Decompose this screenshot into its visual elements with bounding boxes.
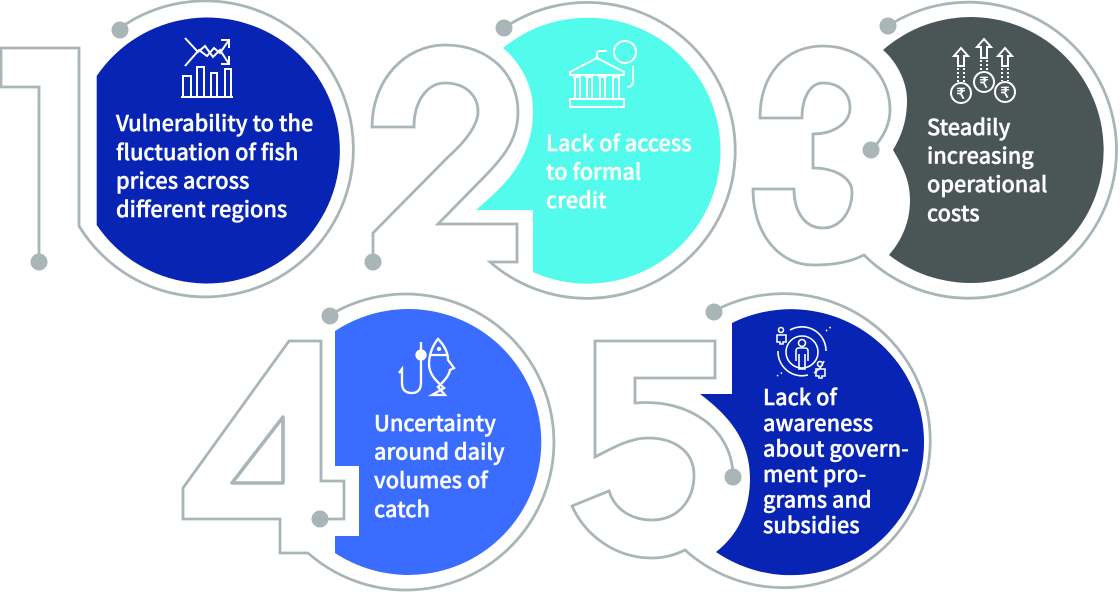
icon: bank with magnifier: [570, 41, 636, 107]
numeral 2 outline with ring: [364, 2, 735, 298]
text: Lack of: [763, 381, 837, 412]
blue circle: [97, 17, 340, 283]
numeral 3 outline with ring: [753, 2, 1116, 298]
text: volumes of: [374, 464, 489, 495]
text: grams and: [763, 484, 872, 514]
text: Vulnerability to the: [116, 107, 313, 138]
panel 4: daily catch: [183, 294, 554, 590]
icon: chart with crossing arrows: [181, 38, 233, 97]
text: subsidies: [763, 509, 860, 540]
icon: people in rings: [777, 326, 832, 378]
text: to formal: [546, 156, 641, 186]
icon: rising rupee coins: [951, 39, 1015, 103]
turquoise shape: [476, 18, 721, 284]
text: about govern-: [763, 432, 909, 464]
text: operational: [927, 168, 1047, 199]
dark shape: [883, 17, 1104, 283]
text: awareness: [763, 407, 873, 438]
numeral 5 outline with ring: [572, 294, 930, 588]
text: costs: [927, 197, 980, 228]
blue shape: [700, 309, 924, 575]
rupee symbols: ₹: [1000, 86, 1010, 102]
rupee symbols: ₹: [956, 86, 966, 102]
text: Lack of access: [546, 127, 692, 158]
text: around daily: [374, 436, 505, 466]
icon: hook and fish: [399, 339, 454, 395]
blue shape: [335, 309, 541, 575]
numeral 4 outline with ring: [183, 294, 554, 590]
text: credit: [546, 184, 607, 215]
panel 3: operational costs: [753, 2, 1116, 298]
panel 2: formal credit: [364, 2, 735, 298]
text: prices across: [116, 164, 249, 196]
text: fluctuation of fish: [116, 136, 298, 167]
panel 1: price fluctuation: [1, 1, 353, 297]
text: Steadily: [927, 111, 1010, 142]
text: Uncertainty: [374, 407, 496, 438]
text: ment pro-: [763, 458, 866, 489]
rupee symbols: ₹: [979, 76, 989, 92]
numeral 1 outline with ring: [1, 1, 353, 297]
text: different regions: [116, 193, 287, 224]
text: increasing: [927, 140, 1034, 170]
text: catch: [374, 493, 430, 524]
panel 5: awareness: [572, 294, 930, 588]
